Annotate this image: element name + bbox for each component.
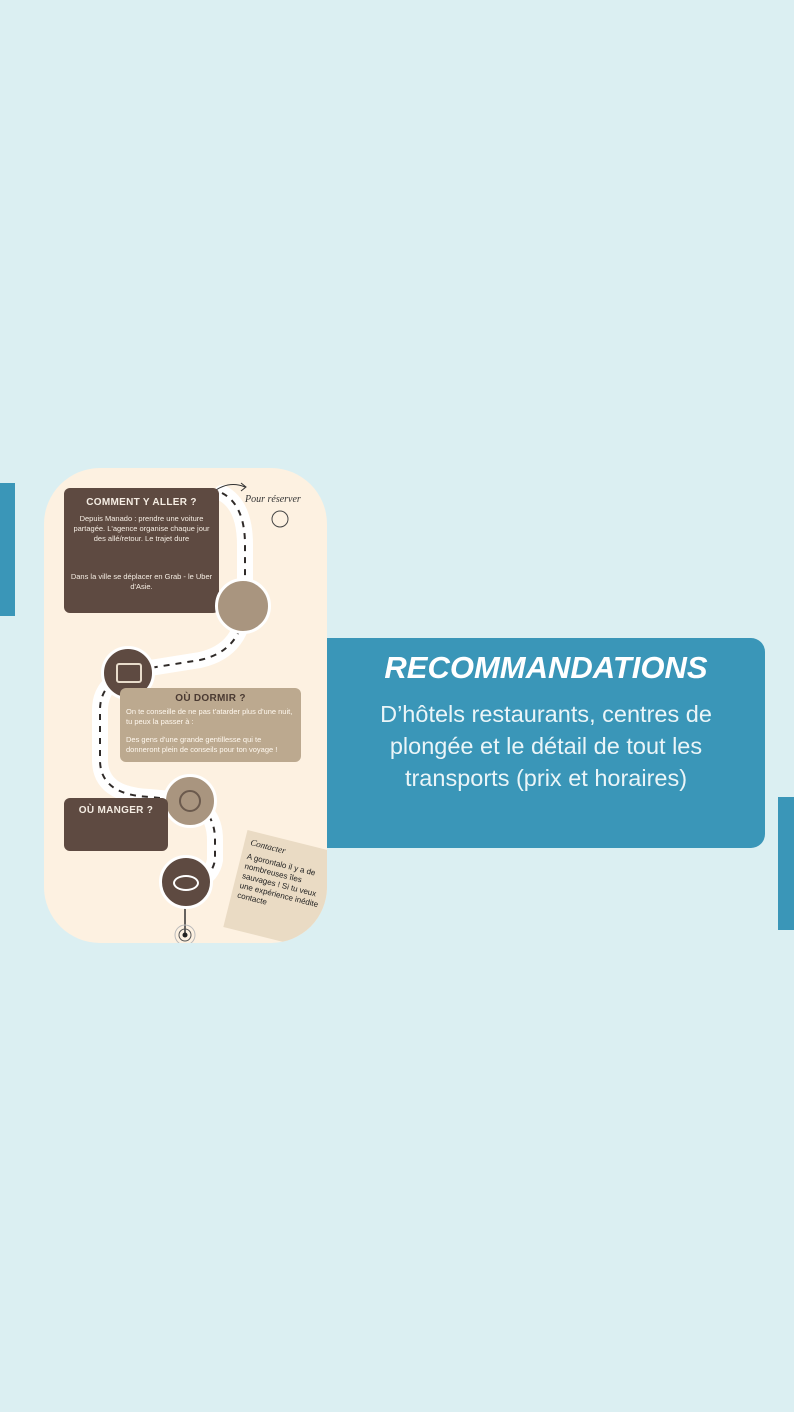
box: ou dormir: On te conseille de ne pas t'atarder plus d'une nuit, tu peux la passer à : — [126, 707, 292, 726]
box: comment y aller: Depuis Manado : prendre une voiture partagée. L'agence organise chaque jour des allé/retour. Le trajet dure — [73, 514, 210, 543]
phone screenshot card — [44, 468, 327, 943]
paper note: contacter: A gorontalo il y a de nombreuses îles sauvages ! Si tu veux une expérience inédite contacte — [236, 852, 319, 909]
box: comment y aller — [64, 488, 219, 613]
box: ou dormir: Des gens d'une grande gentillesse qui te donneront plein de conseils pour ton voyage ! — [126, 735, 277, 754]
left blue accent bar — [0, 483, 15, 616]
paper note: contacter: Contacter — [249, 837, 287, 856]
box: comment y aller: COMMENT Y ALLER ? — [86, 497, 197, 508]
box: ou manger: OÙ MANGER ? — [79, 805, 153, 816]
icon: eye — [159, 855, 213, 909]
box: comment y aller: Dans la ville se déplacer en Grab - le Uber d'Asie. — [71, 572, 212, 591]
subtitle text: plongée et le détail de tout les — [390, 733, 702, 759]
subtitle text: D’hôtels restaurants, centres de — [380, 701, 712, 727]
box: ou dormir — [120, 688, 301, 762]
box: ou manger — [64, 798, 168, 851]
icon: bed — [101, 646, 155, 700]
note: pour reserver: Pour réserver — [245, 494, 301, 505]
icon: transport — [215, 578, 271, 634]
panel: recommandations — [327, 638, 765, 848]
icon: plate — [163, 774, 217, 828]
paper note: contacter — [223, 830, 340, 950]
right blue accent bar — [778, 797, 794, 930]
subtitle text: transports (prix et horaires) — [405, 765, 687, 791]
title: RECOMMANDATIONS — [384, 650, 708, 685]
route path — [92, 482, 288, 943]
subtitle text — [380, 701, 712, 791]
box: ou dormir: OÙ DORMIR ? — [175, 693, 246, 704]
